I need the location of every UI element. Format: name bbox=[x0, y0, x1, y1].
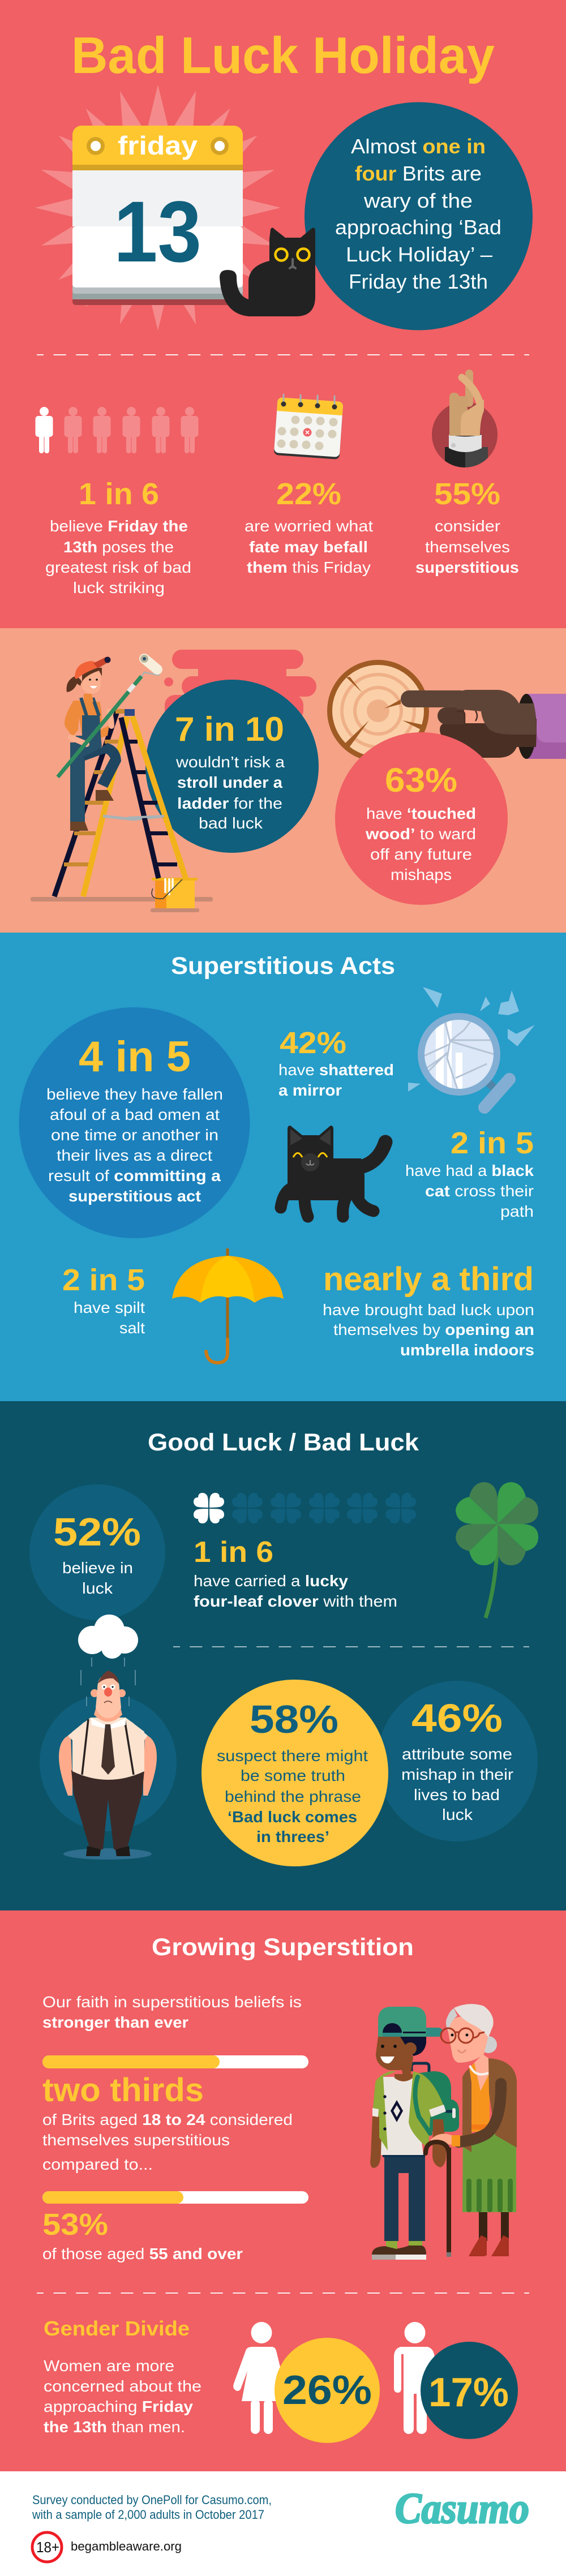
callout: 52%: 52% bbox=[53, 1510, 141, 1554]
stat: 55% bbox=[415, 477, 519, 576]
panel: ladder and wood bbox=[0, 628, 566, 933]
text block: intro bbox=[42, 1993, 302, 2031]
icon: crossed fingers bbox=[432, 373, 498, 470]
stat: 42%: have shattered bbox=[278, 1061, 394, 1079]
stat: 2 in 5 salt bbox=[62, 1263, 145, 1337]
panel: growing superstition bbox=[0, 1910, 566, 2471]
stat: nearly a third: themselves by opening an bbox=[333, 1321, 534, 1338]
callout: 63%: have ‘touched bbox=[366, 805, 476, 822]
panel: intro bbox=[0, 0, 566, 628]
callout: 58%: behind the phrase bbox=[225, 1788, 361, 1805]
bar chart: 53% bbox=[42, 2191, 308, 2204]
icon: tree stump cross-section bbox=[327, 660, 429, 762]
stat: 2 in 5 black cat bbox=[405, 1126, 534, 1220]
stat: 53%: of those aged 55 and over bbox=[42, 2245, 243, 2262]
stat: 17%: 17% bbox=[428, 2370, 509, 2415]
stat: 1 in 6 clover: have carried a lucky bbox=[194, 1572, 348, 1590]
icon: 18+ badge: 18+ bbox=[36, 2539, 59, 2556]
callout: 58%: suspect there might bbox=[217, 1747, 368, 1764]
icon: unlucky man under rain cloud bbox=[40, 1615, 177, 1860]
stat: 55%: consider bbox=[435, 517, 500, 535]
stat: 1 in 6: 13th poses the bbox=[63, 538, 174, 556]
stat: two thirds: of Brits aged 18 to 24 considered bbox=[42, 2111, 293, 2128]
stat: 1 in 6: believe Friday the bbox=[50, 517, 188, 535]
callout: 58%: ‘Bad luck comes bbox=[228, 1808, 357, 1826]
icon: paint splat bbox=[164, 650, 316, 721]
callout: 58%: be some truth bbox=[241, 1767, 345, 1784]
callout: 58%: in threes’ bbox=[256, 1828, 329, 1845]
text block: survey source: with a sample of 2,000 adults in October 2017 bbox=[32, 2508, 264, 2522]
icon: wall calendar bbox=[274, 394, 343, 460]
icon: row of six clovers bbox=[194, 1493, 416, 1523]
text block: gender divide: Women are more bbox=[44, 2357, 174, 2375]
stat: nearly a third: nearly a third bbox=[323, 1261, 534, 1298]
icon: 18+ badge bbox=[32, 2532, 62, 2562]
text: begambleaware: begambleaware.org bbox=[71, 2539, 182, 2553]
callout: 7 in 10 bbox=[145, 680, 319, 853]
stat: nearly a third: umbrella indoors bbox=[400, 1341, 534, 1359]
callout: one in four: wary of the bbox=[363, 189, 473, 212]
stat: 2 in 5 salt: have spilt bbox=[74, 1299, 145, 1316]
icon: man figure bbox=[394, 2322, 435, 2434]
panel: superstitious acts bbox=[0, 933, 566, 1401]
text block: survey source bbox=[32, 2493, 272, 2522]
stat: 1 in 6: 1 in 6 bbox=[79, 477, 159, 511]
icon: calendar Friday 13: friday bbox=[118, 131, 198, 160]
icon: sitting black cat bbox=[220, 227, 315, 316]
stat: 42%: a mirror bbox=[278, 1081, 342, 1099]
callout: 7 in 10: stroll under a bbox=[177, 774, 282, 791]
stat: nearly a third bbox=[323, 1261, 534, 1359]
stat: 2 in 5 black cat: 2 in 5 bbox=[451, 1126, 534, 1160]
stat: 1 in 6 bbox=[45, 477, 191, 596]
callout: 46%: attribute some bbox=[402, 1745, 512, 1763]
stat: 22%: fate may befall bbox=[249, 538, 368, 556]
callout: 4 in 5: superstitious act bbox=[68, 1187, 201, 1205]
stat: 2 in 5 salt: salt bbox=[119, 1319, 145, 1337]
stat: 2 in 5 black cat: cat cross their bbox=[425, 1182, 534, 1200]
callout: one in four: Almost one in bbox=[351, 135, 486, 158]
stat: 1 in 6 clover: four-leaf clover with them bbox=[194, 1592, 397, 1610]
icon: pointing hand with purple sleeve bbox=[401, 690, 566, 759]
icon: yellow umbrella bbox=[172, 1248, 284, 1363]
ladder legs over callout bbox=[121, 716, 186, 878]
text block: gender divide: Gender Divide bbox=[44, 2317, 190, 2340]
callout: 58%: 58% bbox=[250, 1697, 338, 1741]
stat: nearly a third: have brought bad luck upon bbox=[323, 1301, 534, 1319]
callout: 7 in 10: ladder for the bbox=[177, 795, 282, 812]
title: Bad Luck Holiday bbox=[71, 27, 495, 84]
logo: Casumo: Casumo bbox=[395, 2485, 529, 2532]
icon: painter on ladder bbox=[31, 655, 213, 912]
heading: Good Luck / Bad Luck bbox=[148, 1429, 419, 1456]
icon: woman figure bbox=[233, 2322, 289, 2434]
text block: gender divide: approaching Friday bbox=[44, 2398, 193, 2415]
icon: starburst bbox=[35, 85, 281, 330]
callout: 52%: believe in bbox=[62, 1559, 133, 1577]
callout: 4 in 5: believe they have fallen bbox=[46, 1085, 223, 1103]
callout: 46%: lives to bad bbox=[414, 1786, 500, 1804]
callout: 4 in 5: result of committing a bbox=[48, 1167, 221, 1184]
text block: survey source: Survey conducted by OnePoll for Casumo.com, bbox=[32, 2493, 272, 2507]
stat: 22% bbox=[245, 477, 373, 576]
callout: 7 in 10: wouldn’t risk a bbox=[175, 753, 285, 771]
callout: 46%: 46% bbox=[411, 1696, 503, 1740]
callout: 63%: 63% bbox=[385, 761, 457, 799]
stat: 1 in 6: greatest risk of bad bbox=[45, 559, 191, 576]
callout: 7 in 10: bad luck bbox=[199, 814, 263, 832]
callout: 52% bbox=[29, 1484, 165, 1620]
stat: two thirds bbox=[42, 2072, 293, 2173]
stat: 42%: 42% bbox=[280, 1026, 346, 1060]
stat: 22%: are worried what bbox=[245, 517, 373, 535]
stat: two thirds: two thirds bbox=[42, 2072, 204, 2109]
stat: 53%: 53% bbox=[42, 2208, 108, 2242]
icon: one in six people bbox=[35, 407, 198, 453]
stat: 1 in 6 clover: 1 in 6 bbox=[194, 1536, 273, 1569]
callout: 58% bbox=[201, 1680, 388, 1866]
text block: intro: stronger than ever bbox=[42, 2013, 188, 2031]
stat: 42% bbox=[278, 1026, 394, 1099]
callout: one in four: four Brits are bbox=[355, 162, 482, 185]
icon: walking black cat bbox=[281, 1126, 385, 1217]
icon: teenage boy with backpack bbox=[370, 2007, 459, 2260]
stat: 26%: 26% bbox=[282, 2368, 372, 2413]
callout: 52%: luck bbox=[82, 1579, 113, 1597]
callout: 46%: luck bbox=[442, 1806, 473, 1823]
stat: 2 in 5 salt: 2 in 5 bbox=[62, 1263, 145, 1297]
stat: 2 in 5 black cat: path bbox=[500, 1203, 534, 1220]
stat: 1 in 6 clover bbox=[194, 1536, 397, 1610]
stat: 55%: superstitious bbox=[415, 559, 519, 576]
stat: 17% bbox=[421, 2342, 518, 2439]
stat: 55%: themselves bbox=[425, 538, 510, 556]
stat: 22%: them this Friday bbox=[247, 559, 371, 576]
icon: paint bucket bbox=[151, 878, 199, 912]
icon: shattered mirror bbox=[408, 987, 535, 1107]
icon: elderly woman with cane bbox=[426, 2004, 517, 2257]
callout: 4 in 5: 4 in 5 bbox=[79, 1033, 191, 1081]
heading: Growing Superstition bbox=[152, 1934, 414, 1961]
stat: 53% bbox=[42, 2208, 243, 2262]
callout: one in four: Luck Holiday’ – bbox=[346, 243, 492, 266]
heading: Superstitious Acts bbox=[171, 952, 395, 980]
icon: four-leaf clover bbox=[456, 1482, 538, 1618]
stat: two thirds: themselves superstitious bbox=[42, 2131, 230, 2149]
stat: two thirds: compared to... bbox=[42, 2156, 153, 2173]
callout: 4 in 5: one time or another in bbox=[51, 1126, 218, 1144]
callout: 63%: mishaps bbox=[391, 866, 452, 883]
panel: good luck bad luck bbox=[0, 1401, 566, 1910]
callout: 46%: mishap in their bbox=[401, 1766, 513, 1783]
text block: gender divide: the 13th than men. bbox=[44, 2418, 185, 2436]
callout: 46% bbox=[377, 1681, 538, 1841]
stat: 26% bbox=[275, 2338, 380, 2443]
callout: 4 in 5 bbox=[19, 1007, 250, 1238]
callout: one in four bbox=[305, 102, 533, 330]
text block: gender divide: concerned about the bbox=[44, 2377, 201, 2395]
stat: 22%: 22% bbox=[276, 477, 341, 511]
text block: intro: Our faith in superstitious beliefs is bbox=[42, 1993, 302, 2011]
text block: gender divide bbox=[44, 2317, 201, 2436]
callout: one in four: approaching ‘Bad bbox=[335, 216, 501, 239]
panel: footer bbox=[0, 2471, 566, 2576]
callout: 63%: off any future bbox=[370, 845, 472, 863]
stat: 2 in 5 black cat: have had a black bbox=[405, 1162, 534, 1179]
callout: one in four: Friday the 13th bbox=[349, 270, 488, 293]
bar chart: two thirds bbox=[42, 2055, 308, 2068]
callout: 4 in 5: their lives as a direct bbox=[57, 1147, 212, 1164]
callout: 4 in 5: afoul of a bad omen at bbox=[50, 1106, 220, 1123]
callout: 63%: wood’ to ward bbox=[365, 825, 476, 843]
stat: 1 in 6: luck striking bbox=[73, 579, 165, 596]
callout: 7 in 10: 7 in 10 bbox=[175, 710, 284, 748]
stat: 55%: 55% bbox=[434, 477, 500, 511]
callout: 63% bbox=[335, 732, 508, 905]
icon: calendar Friday 13: 13 bbox=[114, 183, 201, 280]
icon: calendar Friday 13 bbox=[72, 126, 243, 305]
